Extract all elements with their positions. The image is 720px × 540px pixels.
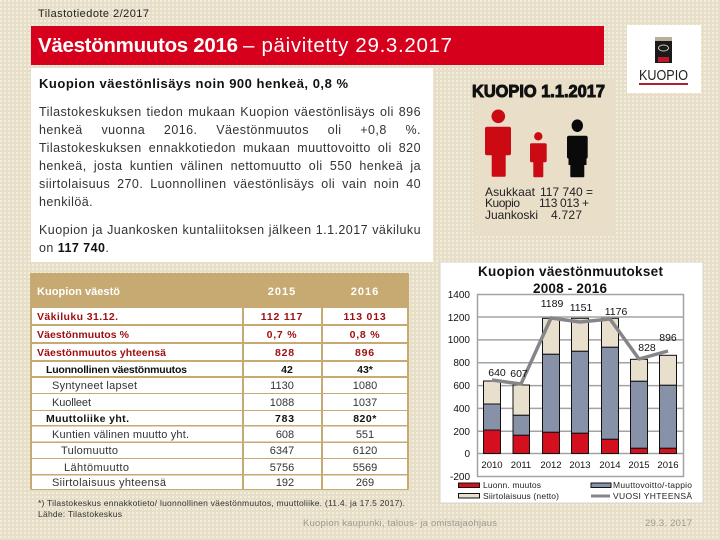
chart legend	[458, 480, 692, 501]
y axis labels: 600	[453, 381, 470, 392]
chart title	[478, 264, 664, 296]
table footnote	[38, 498, 405, 519]
table text: detail rows: 1130	[270, 380, 294, 392]
y axis labels	[448, 290, 470, 483]
summary body text: Kuopion ja Juankosken kuntaliitoksen jälkeen 1.1.2017 väkiluku	[39, 223, 421, 237]
icon: large red figure	[485, 110, 511, 177]
panel: chart	[440, 262, 703, 503]
table header: 2016	[351, 286, 379, 298]
population breakdown text: Kuopio	[485, 196, 520, 210]
x axis labels: 2011	[511, 460, 531, 471]
y axis labels: 1200	[448, 313, 470, 324]
table text: detail rows: Kuntien välinen muutto yht.	[52, 429, 189, 441]
infographic heading: KUOPIO 1.1.2017	[472, 81, 605, 101]
x axis labels: 2016	[657, 460, 679, 471]
data labels: 1189	[541, 298, 563, 310]
table footnote: *) Tilastokeskus ennakkotieto/ luonnollinen väestönmuutos, muuttoliike. (11.4. ja 17.5 2017).	[38, 498, 405, 508]
summary body text: henkeä, josta kuntien välinen nettomuutto oli 550 henkeä ja	[39, 159, 421, 173]
y axis labels: 800	[453, 358, 470, 369]
table text: detail rows: 1080	[353, 380, 377, 392]
title banner: Väestönmuutos 2016	[38, 34, 238, 57]
chart title: 2008 - 2016	[533, 281, 607, 296]
data labels: 1176	[605, 306, 627, 318]
icon: small red figure	[530, 132, 547, 177]
table text: red key figures: Väestönmuutos %	[37, 329, 130, 341]
table text: red key figures: 0,8 %	[350, 329, 380, 341]
table header	[37, 286, 379, 298]
title banner: – päivitetty 29.3.2017	[243, 34, 452, 57]
chart legend: Muuttovoitto/-tappio	[613, 480, 692, 490]
table text: bold subtotals: Muuttoliike yht.	[46, 413, 129, 425]
table text: detail rows: 1037	[353, 397, 377, 409]
panel: summary text background	[31, 68, 433, 262]
summary body text: Tilastokeskuksen tiedon mukaan Kuopion väestönlisäys oli 896	[39, 105, 421, 119]
population breakdown text: Asukkaat	[485, 185, 536, 199]
data labels	[488, 298, 677, 380]
data labels: 828	[638, 342, 656, 354]
logo: Kuopio: KUOPIO	[639, 67, 688, 84]
chart legend: Siirtolaisuus (netto)	[483, 491, 559, 501]
stacked bars	[484, 318, 676, 454]
table text: detail rows: 5569	[353, 462, 377, 474]
population breakdown text	[485, 185, 593, 222]
table text: bold subtotals: 820*	[353, 413, 377, 425]
chart title: Kuopion väestönmuutokset	[478, 264, 664, 279]
table text: detail rows: Siirtolaisuus yhteensä	[52, 477, 167, 489]
chart gridlines and frame	[478, 294, 684, 476]
summary body text: henkeä vuonna 2016. Väestönmuutos oli +0,8 %.	[39, 123, 421, 137]
report label: Tilastotiedote 2/2017	[38, 8, 149, 20]
icon: black figure	[567, 119, 588, 177]
chart legend: VUOSI YHTEENSÄ	[613, 491, 692, 501]
table text: detail rows: Kuolleet	[52, 397, 91, 409]
data labels: 640	[488, 367, 506, 379]
table text: detail rows: Tulomuutto	[61, 445, 118, 457]
summary body text	[39, 105, 421, 255]
x axis labels: 2014	[599, 460, 621, 471]
table text: red key figures	[37, 311, 386, 359]
table text: detail rows: Syntyneet lapset	[52, 380, 137, 392]
data labels: 896	[659, 332, 677, 344]
table text: detail rows: 192	[276, 477, 294, 489]
table text: detail rows: 6120	[353, 445, 377, 457]
x axis labels	[481, 460, 679, 471]
title banner	[31, 26, 604, 65]
table text: red key figures: 896	[355, 347, 375, 359]
table text: red key figures: 113 013	[344, 311, 386, 323]
data labels: 1151	[570, 302, 592, 314]
population breakdown text: Juankoski	[485, 208, 538, 222]
y axis labels: 200	[453, 427, 470, 438]
y axis labels: -200	[450, 472, 470, 483]
table text: red key figures: 828	[275, 347, 295, 359]
x axis labels: 2013	[569, 460, 591, 471]
summary body text: siirtolaisuus 270. Luonnollinen väestönlisäys oli vain noin 40	[39, 177, 421, 191]
table text: detail rows: 6347	[270, 445, 294, 457]
table text: red key figures: 0,7 %	[267, 329, 297, 341]
x axis labels: 2010	[481, 460, 503, 471]
table text: bold subtotals	[46, 364, 377, 425]
population breakdown text: 117 740 =	[540, 185, 593, 199]
summary body text: henkilöä.	[39, 195, 93, 209]
table text: bold subtotals: 783	[275, 413, 295, 425]
table text: detail rows: 269	[356, 477, 374, 489]
table footnote: Lähde: Tilastokeskus	[38, 509, 122, 519]
table text: red key figures: Väestönmuutos yhteensä	[37, 347, 166, 359]
table text: bold subtotals: 42	[281, 364, 293, 376]
y axis labels: 400	[453, 404, 470, 415]
table text: detail rows: 1088	[270, 397, 294, 409]
table text: detail rows: 608	[276, 429, 294, 441]
summary heading: Kuopion väestönlisäys noin 900 henkeä, 0,8 %	[39, 76, 348, 91]
x axis labels: 2012	[540, 460, 562, 471]
footer date: 29.3. 2017	[645, 518, 692, 529]
y axis labels: 0	[464, 449, 470, 460]
table rows	[32, 308, 407, 489]
panel: population table	[30, 273, 409, 490]
table text: bold subtotals: Luonnollinen väestönmuutos	[46, 364, 187, 376]
panel: population infographic	[472, 78, 614, 235]
population breakdown text: 113 013 +	[539, 196, 589, 210]
table text: detail rows	[52, 380, 377, 489]
population breakdown text: 4.727	[551, 208, 582, 222]
footer organisation: Kuopion kaupunki, talous- ja omistajaohjaus	[303, 518, 497, 529]
summary body text: Tilastokeskuksen ennakkotiedon mukaan muuttovoitto oli 820	[39, 141, 421, 155]
table text: detail rows: 5756	[270, 462, 294, 474]
table text: red key figures: 112 117	[261, 311, 303, 323]
chart legend: Luonn. muutos	[483, 480, 541, 490]
table text: detail rows: Lähtömuutto	[64, 462, 129, 474]
table header: Kuopion väestö	[37, 286, 120, 298]
y axis labels: 1000	[448, 335, 470, 346]
logo: Kuopio	[627, 25, 701, 93]
table text: detail rows: 551	[356, 429, 374, 441]
x axis labels: 2015	[628, 460, 650, 471]
table text: bold subtotals: 43*	[357, 364, 374, 376]
table text: red key figures: Väkiluku 31.12.	[37, 311, 118, 323]
total line	[492, 318, 668, 384]
data labels: 607	[510, 368, 528, 380]
y axis labels: 1400	[448, 290, 470, 301]
table header: 2015	[268, 286, 296, 298]
summary body text: on 117 740.	[39, 241, 109, 255]
